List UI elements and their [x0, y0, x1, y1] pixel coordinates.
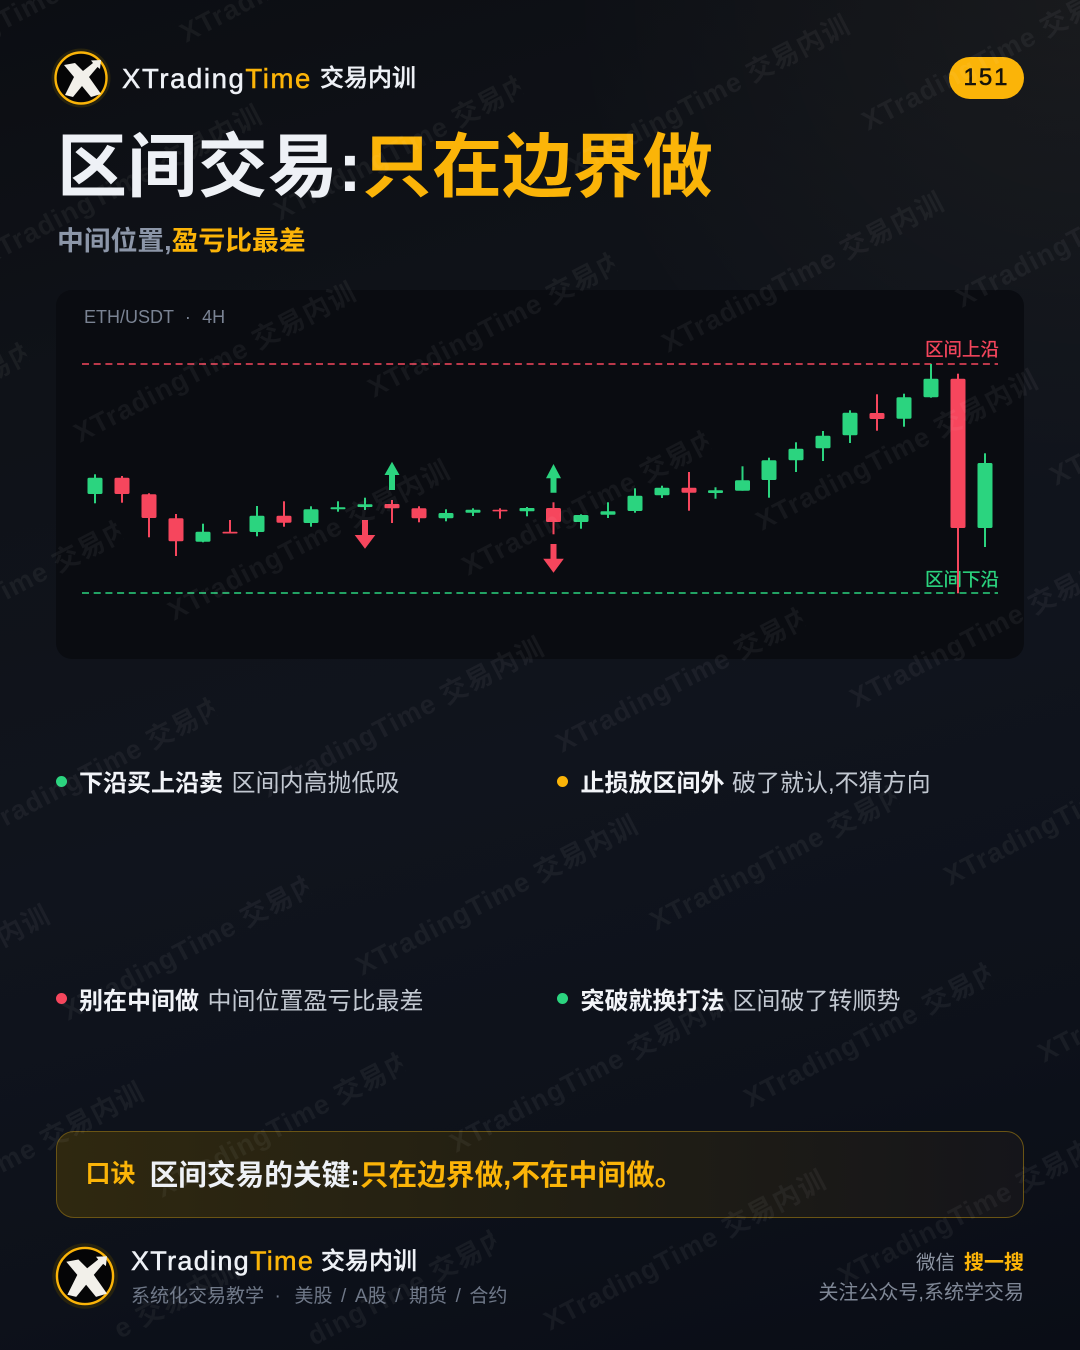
- mantra label: 口诀: [86, 1160, 136, 1188]
- range upper line: [82, 363, 998, 365]
- text: 别在中间做 中间位置盈亏比最差: [79, 988, 424, 1015]
- text: 下沿买上沿卖 区间内高抛低吸: [79, 770, 400, 797]
- text: 突破就换打法 区间破了转顺势: [580, 988, 900, 1015]
- brand name: header: 交易内训: [320, 65, 416, 92]
- green candles: [88, 364, 992, 547]
- dot: red: [56, 993, 67, 1004]
- label: range upper bound: 区间上沿: [925, 339, 999, 360]
- chart: candles and range lines: [82, 363, 998, 594]
- dot: green: [557, 993, 568, 1004]
- title: 区间交易:只在边界做: [57, 128, 713, 206]
- watermark pattern: XTradingTime 交易内训: [151, 1032, 443, 1203]
- arrow: up at first fake move: [384, 462, 400, 490]
- watermark pattern: XTradingTime 交易内训: [539, 1165, 831, 1336]
- watermark pattern: XTradingTime 交易内训: [563, 10, 855, 181]
- arrow: down at first fake move: [355, 520, 375, 549]
- bullet: switch on breakout: [557, 988, 900, 1015]
- issue number badge: 151: [963, 64, 1010, 91]
- dot: green: [56, 776, 67, 787]
- footer wechat search: 微信 搜一搜: [916, 1252, 1024, 1274]
- watermark pattern: XTradingTime 交易内训: [445, 987, 737, 1158]
- brand name: footer: [131, 1246, 417, 1276]
- brand name: header: [122, 63, 416, 94]
- watermark pattern: XTradingTime 交易内训: [269, 55, 561, 226]
- watermark pattern: XTradingTime 交易内训: [457, 410, 749, 581]
- callout: mantra: [56, 1131, 1024, 1218]
- issue number badge: [949, 57, 1024, 99]
- mantra text: 区间交易的关键:只在边界做,不在中间做。: [150, 1160, 683, 1192]
- watermark pattern: e 交易内训: [109, 1254, 245, 1344]
- watermark pattern: XTradingTime 交易内训: [739, 942, 1031, 1113]
- panel: candlestick chart: [56, 290, 1024, 659]
- red candles: [114, 374, 966, 593]
- watermark pattern: XTradingTime 交易内训: [57, 855, 349, 1026]
- dot: yellow: [557, 776, 568, 787]
- bullet: stop outside range: [557, 770, 931, 797]
- arrow: up at middle candle: [546, 464, 561, 493]
- logo: footer: [52, 1243, 118, 1309]
- watermark pattern: dingTime 交易内训: [303, 1209, 539, 1350]
- brand name: footer: 交易内训: [321, 1248, 417, 1275]
- bullet: avoid the middle: [56, 988, 424, 1015]
- brand name: footer: XTradingTime: [131, 1246, 314, 1276]
- text: 止损放区间外 破了就认,不猜方向: [580, 770, 931, 797]
- subtitle: 中间位置,盈亏比最差: [57, 226, 306, 256]
- watermark pattern: XTradingTime 交易内训: [257, 632, 549, 803]
- watermark pattern: XTradingTime 交易内训: [363, 232, 655, 403]
- arrow: down at middle candle: [543, 544, 564, 573]
- watermark pattern: XTradingTime 交易内训: [69, 277, 361, 448]
- watermark pattern: XTradingTime 交易内训: [751, 365, 1043, 536]
- footer follow text: 关注公众号,系统学交易: [818, 1282, 1024, 1304]
- watermark pattern: XTradingTime 交易内训: [657, 187, 949, 358]
- bullet: buy low sell high: [56, 770, 400, 797]
- brand name: header: XTradingTime: [122, 63, 312, 94]
- watermark pattern: XTradingTime 交易内训: [645, 765, 937, 936]
- range lower line: [82, 592, 998, 594]
- logo: header: [52, 48, 110, 108]
- watermark pattern: XTradingTime 交易内训: [551, 587, 843, 758]
- footer tagline: 系统化交易教学 · 美股 / A股 / 期货 / 合约: [131, 1286, 507, 1307]
- watermark pattern: XTradingTime 交易内训: [163, 455, 455, 626]
- chart symbol label: ETH/USDT · 4H: [84, 307, 225, 327]
- label: range lower bound: 区间下沿: [925, 569, 999, 590]
- watermark pattern: XTradingTime 交易内训: [351, 810, 643, 981]
